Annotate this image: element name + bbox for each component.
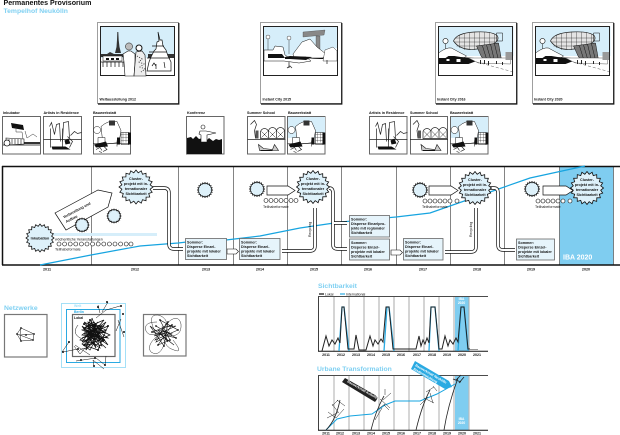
years: 2014 <box>367 353 375 357</box>
legend <box>319 292 365 296</box>
summer box 2014 <box>240 238 280 260</box>
tag: blue: Stadtentwicklung <box>412 367 438 384</box>
network: nested levels <box>62 301 126 369</box>
transformation curves <box>326 375 464 430</box>
legend: International <box>346 292 365 296</box>
network: large loops <box>144 314 186 356</box>
years: 2018 <box>428 353 436 357</box>
years <box>322 432 481 435</box>
summer box 2014: Disperse Einzel- <box>241 245 270 249</box>
starburst: cluster 2018: ternationaler <box>464 188 487 192</box>
label: Teilhabeformate <box>263 205 289 209</box>
starburst: cluster 2018: Cluster- <box>468 178 483 182</box>
summer box 2019: Sichtbarkeit <box>518 254 540 258</box>
starburst: cluster 2020: ternationaler <box>576 188 599 192</box>
years <box>322 353 481 357</box>
tag arrow: Vorbereitung und Aufbau <box>55 190 112 230</box>
participation circles <box>57 242 133 246</box>
starburst small <box>107 209 121 223</box>
small starbursts <box>198 182 540 198</box>
summer box 2016 regional: Disperse Einzelpro- <box>351 222 386 226</box>
small card: Artists in Residence: Artists in Residence <box>44 111 79 115</box>
years: 2013 <box>352 353 360 357</box>
starburst: cluster 2020 <box>570 172 604 204</box>
summer box 2013: Sichtbarkeit <box>187 254 209 258</box>
starburst: cluster 2012: ternationaler <box>125 187 148 191</box>
tag arrow: Vorbereitung und Aufbau: Vorbereitung und <box>63 201 92 219</box>
chart: Urbane Transformation: IBA <box>459 417 465 421</box>
years: 2016 <box>397 353 405 357</box>
year axis: 2013 <box>202 268 210 272</box>
year axis: 2020 <box>582 268 590 272</box>
year axis: 2011 <box>43 268 51 272</box>
summer box 2013: projekte mit lokaler <box>187 250 221 254</box>
visibility curve <box>40 166 585 265</box>
summer box 2016 local: Disperse Einzel- <box>351 246 380 250</box>
starburst: cluster 2012: Cluster- <box>129 177 144 181</box>
year axis: 2015 <box>310 268 318 272</box>
summer box 2017: Disperse Einzel- <box>405 245 434 249</box>
summer box 2014: Sichtbarkeit <box>241 254 263 258</box>
summer box 2016 regional <box>350 216 390 237</box>
small card: Bauwerkstatt: Bauwerkstatt <box>93 111 117 115</box>
small card: Konferenz <box>186 111 224 154</box>
summer box 2016 regional: jekte mit regionaler <box>350 226 385 230</box>
small card: Bauwerkstatt 3: Bauwerkstatt <box>450 111 474 115</box>
summer box 2019: Sommer: <box>518 241 534 245</box>
starburst: Inkubation <box>26 224 54 252</box>
summer box 2019: Disperse Einzel- <box>518 246 547 250</box>
summer box 2014: projekte mit lokaler <box>241 250 275 254</box>
tag arrow: Vorbereitung und Aufbau: Aufbau <box>65 214 79 224</box>
starburst: cluster 2020: Cluster- <box>580 178 595 182</box>
years: 2011 <box>322 353 330 357</box>
small card: Bauwerkstatt <box>93 111 131 154</box>
small card: Bauwerkstatt 3 <box>450 111 488 154</box>
starburst: cluster 2015 <box>296 170 330 204</box>
small card: Summer School: Summer School <box>247 111 275 115</box>
pipes <box>153 188 515 252</box>
card: Instant City 2015 <box>260 22 342 104</box>
large arrows <box>267 186 573 195</box>
chart: Urbane Transformation: 2020 <box>458 421 465 425</box>
years: 2017 <box>413 353 421 357</box>
small card: Inkubator <box>2 111 40 154</box>
year axis: 2016 <box>364 268 372 272</box>
starburst: Inkubation: Inkubation <box>31 236 50 240</box>
summer box 2019: projekte mit lokaler <box>518 250 552 254</box>
summer box 2016 regional: Sichtbarkeit <box>351 231 373 235</box>
starburst: cluster 2020: projekt mit in- <box>575 183 600 187</box>
summer box 2017: Sichtbarkeit <box>405 254 427 258</box>
starburst: cluster 2018: projekt mit in- <box>463 183 488 187</box>
year axis: 2019 <box>527 268 535 272</box>
summer box 2016 regional: Sommer: <box>351 218 367 222</box>
summer box 2013: Disperse Einzel- <box>187 245 216 249</box>
small card: Artists in Residence <box>44 111 82 154</box>
years: 2020 <box>458 353 466 357</box>
small arrows <box>227 249 402 255</box>
small card: Inkubator: Inkubator <box>3 111 20 115</box>
network: small <box>4 314 47 357</box>
starburst: cluster 2012 <box>119 170 153 204</box>
subtitle: Tempelhof Neukölln <box>4 8 68 15</box>
card: Instant City 2020 <box>532 22 614 104</box>
recycling label 2: Recycling <box>469 222 473 237</box>
summer box 2016 local: Sichtbarkeit <box>351 254 373 258</box>
starburst: cluster 2012: Sichtbarkeit <box>125 192 147 196</box>
small card: Bauwerkstatt 2 <box>288 111 326 154</box>
heading: Sichtbarkeit: Sichtbarkeit <box>318 283 358 290</box>
years: 2021 <box>473 353 481 357</box>
tag: blue <box>411 361 452 389</box>
years: 2015 <box>382 353 390 357</box>
summer box 2013 <box>186 238 226 260</box>
starburst: cluster 2020: Sichtbarkeit <box>576 193 598 197</box>
starburst: cluster 2015: Sichtbarkeit <box>302 192 324 196</box>
starburst: cluster 2015: ternationaler <box>302 187 325 191</box>
label: Instant City 2016 <box>437 98 466 102</box>
summer box 2013: Sommer: <box>187 240 203 244</box>
label: Teilhabeformate <box>422 205 448 209</box>
small card: Bauwerkstatt 2: Bauwerkstatt <box>288 111 312 115</box>
summer box 2016 local: projekte mit lokaler <box>351 250 385 254</box>
network: nested levels: Berlin <box>74 310 84 314</box>
small card: Artists in Residence 2 <box>369 111 408 154</box>
summer box 2017: Sommer: <box>405 240 421 244</box>
summer box 2014: Sommer: <box>241 240 257 244</box>
chart: Sichtbarkeit: 2020 <box>458 301 465 305</box>
recycling labels: Recycling <box>308 222 312 237</box>
starburst: cluster 2015: projekt mit in- <box>301 182 326 186</box>
small card: Summer School <box>247 111 286 154</box>
tag: black: Bauwerkstatt-Kollektiv <box>346 379 379 401</box>
year axis: 2014 <box>256 268 265 272</box>
summer box 2017 <box>404 238 443 260</box>
circles rows <box>264 198 572 203</box>
label: Instant City 2020 <box>534 98 563 102</box>
chart: Sichtbarkeit: IBA <box>459 297 465 301</box>
year axis: 2018 <box>473 268 481 272</box>
legend: Lokal <box>325 292 334 296</box>
starburst: cluster 2018 <box>458 172 492 204</box>
card: Weltausstellung 2012 <box>98 22 179 104</box>
summer box 2019 <box>516 239 554 260</box>
small card: Artists in Residence 2: Artists in Residence <box>369 111 404 115</box>
heading: Netzwerke: Netzwerke <box>4 305 38 312</box>
IBA label: IBA 2020 <box>563 254 592 262</box>
chart: Sichtbarkeit <box>318 292 488 357</box>
summer box 2016 local <box>350 239 390 260</box>
heading: Urbane Transformation: Urbane Transformation <box>317 366 392 373</box>
network: nested levels: Welt <box>74 304 82 308</box>
pale event band <box>53 233 157 236</box>
starburst small <box>75 218 89 232</box>
small card: Summer School 2 <box>410 111 448 154</box>
starburst: cluster 2015: Cluster- <box>306 177 321 181</box>
years: 2012 <box>337 353 345 357</box>
panel: main timeline <box>2 166 620 272</box>
label: Teilhabeformate <box>55 248 81 252</box>
summer box 2017: projekte mit lokaler <box>405 250 439 254</box>
chart: Urbane Transformation <box>318 361 488 435</box>
network: nested levels: Lokal <box>74 316 83 320</box>
small card: Summer School 2: Summer School <box>410 111 438 115</box>
tag: blue: Bauwerkstatt Neukölln <box>414 363 447 385</box>
starburst: cluster 2012: projekt mit in- <box>124 182 149 186</box>
IBA 2020 band <box>560 167 614 265</box>
starburst: cluster 2018: Sichtbarkeit <box>464 193 486 197</box>
label: Instant City 2015 <box>262 98 291 102</box>
label: Weltausstellung 2012 <box>100 98 136 102</box>
year axis: 2017 <box>419 268 427 272</box>
card: Instant City 2016 <box>436 22 517 104</box>
years: 2019 <box>443 353 451 357</box>
small card: Konferenz: Konferenz <box>187 111 205 115</box>
label: Teilhabeformate <box>535 205 561 209</box>
year axis <box>43 268 590 272</box>
weekly events text: wöchentliche Veranstaltungen <box>55 238 103 242</box>
summer box 2016 local: Sommer: <box>351 241 367 245</box>
year axis: 2012 <box>131 268 139 272</box>
